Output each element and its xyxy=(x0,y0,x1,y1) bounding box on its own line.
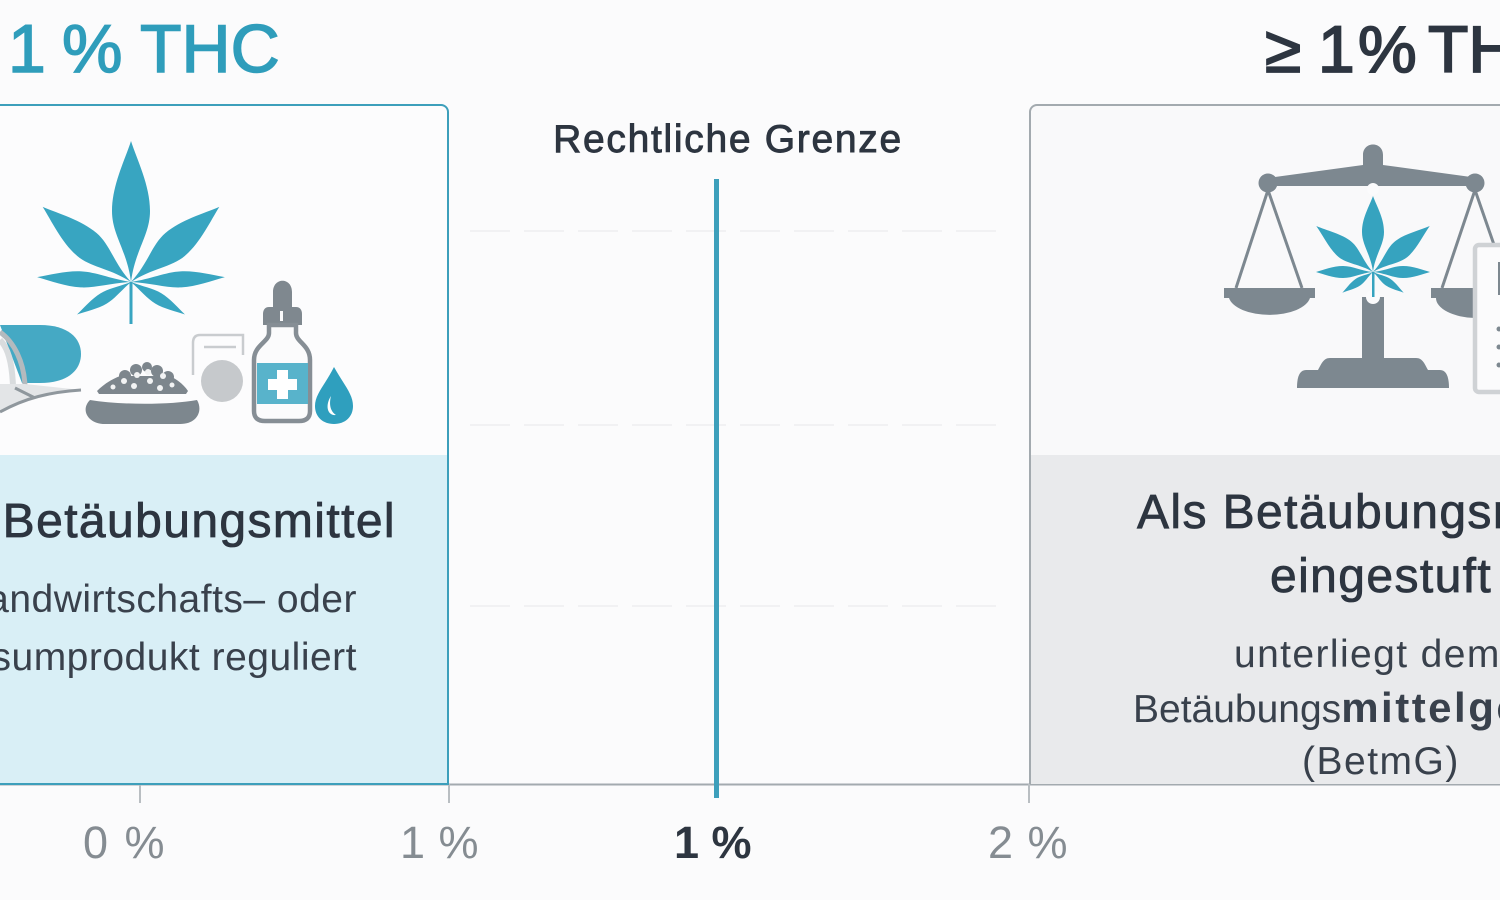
faint guide dashes xyxy=(470,231,1000,606)
limit line xyxy=(714,179,719,798)
body text: subject to BtMG xyxy=(1133,633,1500,783)
icon: supplement package xyxy=(193,335,243,402)
axis labels: 1 % xyxy=(400,817,479,868)
heading: classified as narcotic xyxy=(1137,486,1500,603)
icon: oil drop xyxy=(315,367,353,424)
body text: regulated as agricultural product xyxy=(0,578,357,679)
body text: subject to BtMG: (BetmG) xyxy=(1302,740,1460,783)
icon: seed bowl xyxy=(86,362,199,424)
title: below 1 percent THC: 1 xyxy=(8,11,46,87)
heading: classified as narcotic: eingestuft xyxy=(1270,550,1492,603)
panel: above limit xyxy=(1030,105,1500,784)
axis labels: 0 % xyxy=(83,817,167,868)
title: at least 1 percent THC: ≥ xyxy=(1265,12,1301,86)
panel: below limit xyxy=(0,105,448,784)
icon: scales of justice xyxy=(1224,144,1500,388)
panel text background xyxy=(1030,455,1500,784)
title: below 1 percent THC: % xyxy=(62,11,122,87)
title: below 1 percent THC: THC xyxy=(140,11,280,87)
body text: subject to BtMG: unterliegt dem xyxy=(1234,633,1500,676)
axis xyxy=(0,784,1500,803)
axis labels: 1 % xyxy=(674,817,752,868)
icon: dropper bottle xyxy=(254,281,310,421)
title: at least 1 percent THC: 1 xyxy=(1318,12,1355,86)
icon: textile roll xyxy=(0,325,81,412)
title: at least 1 percent THC: % xyxy=(1358,12,1417,86)
icon: legal document xyxy=(1475,245,1500,392)
panel text background xyxy=(0,455,448,784)
icon: cannabis leaf on scale xyxy=(1310,196,1436,297)
icon: cannabis leaf xyxy=(33,141,229,324)
heading: legal limit: Rechtliche Grenze xyxy=(553,118,903,161)
axis labels xyxy=(83,817,1069,868)
axis labels: 2 % xyxy=(988,817,1069,868)
